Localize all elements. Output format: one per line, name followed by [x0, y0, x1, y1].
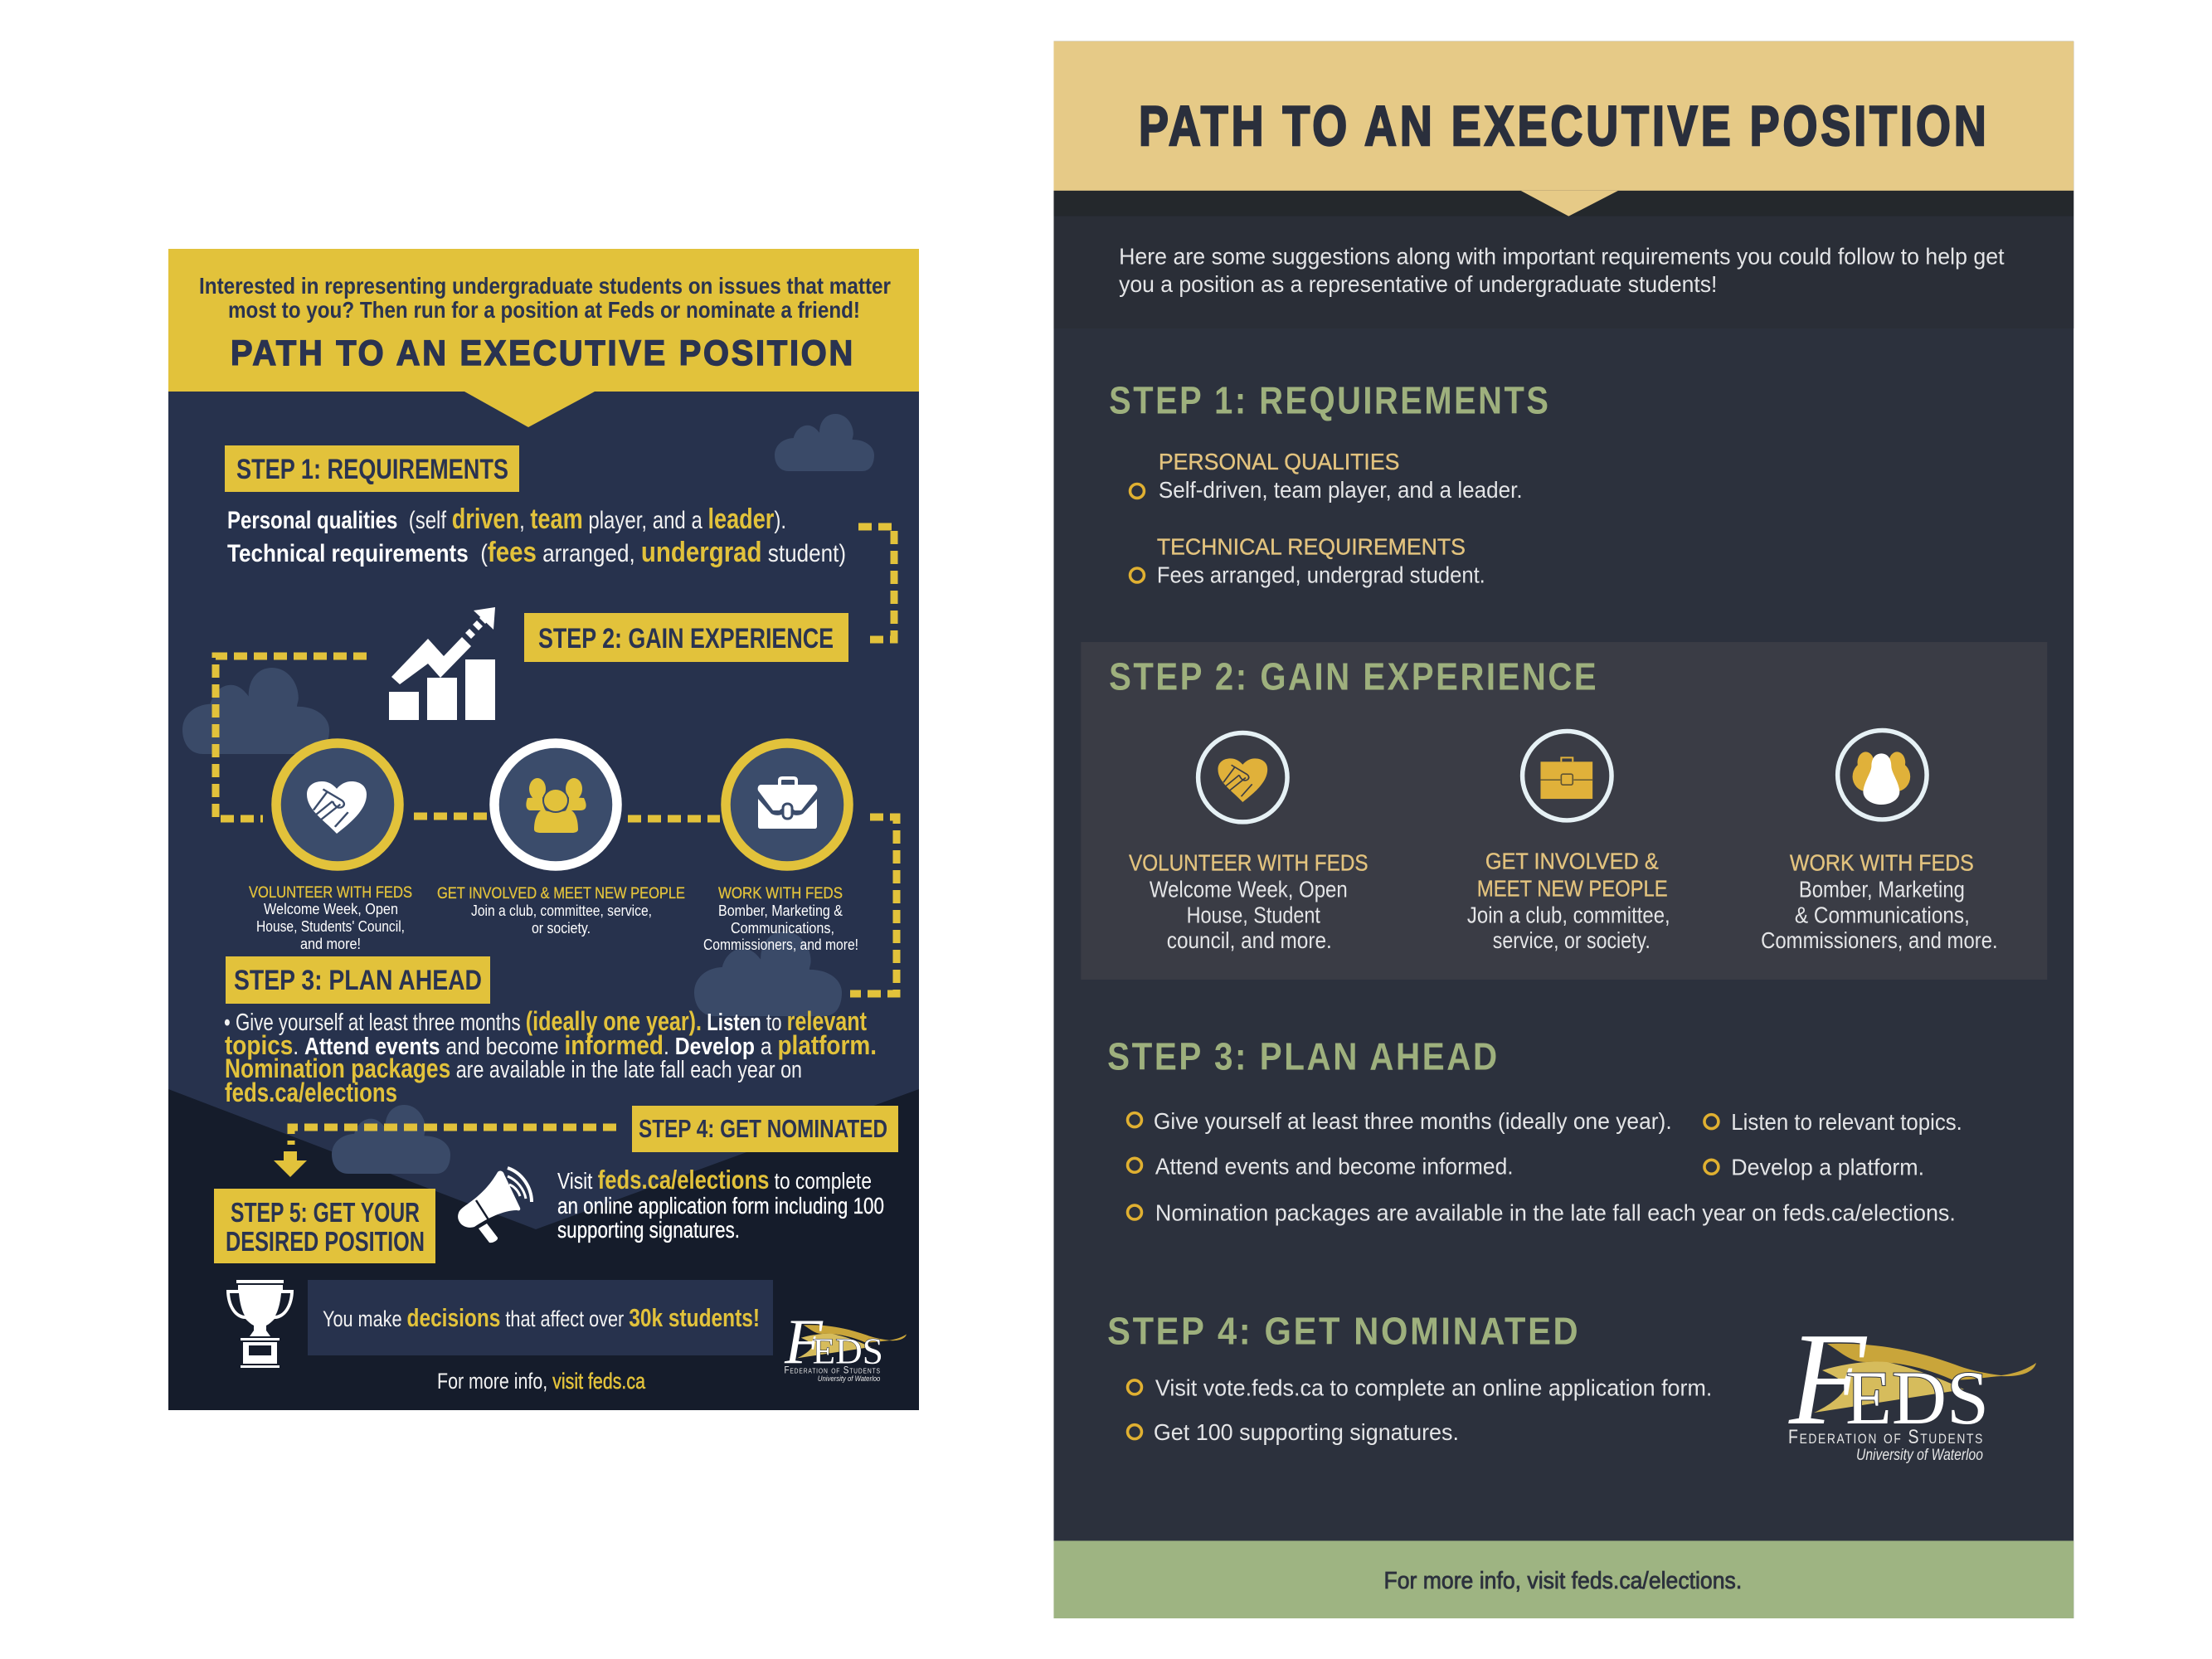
icon: people	[1838, 730, 1927, 820]
logo: feds large: EDS	[1845, 1355, 1989, 1440]
step 3 text: topics. Attend events and become informed. Develop a platform.	[225, 1029, 877, 1060]
intro text: Here are some suggestions along with important requirements you could follow to help get	[1119, 243, 2005, 269]
title: PATH TO AN EXECUTIVE POSITION	[231, 333, 855, 373]
text: volunteer with feds: House, Students' Council,	[256, 918, 405, 935]
arrow: circle 3 to step 3	[850, 817, 897, 994]
header band	[168, 249, 919, 427]
text: work with feds	[703, 885, 858, 953]
step 2 label: STEP 2: GAIN EXPERIENCE	[538, 623, 834, 654]
text: work with feds: Bomber, Marketing &	[718, 902, 843, 919]
text: get involved: service, or society.	[1493, 927, 1650, 953]
step 5 label: DESIRED POSITION	[226, 1226, 425, 1257]
step 3 list: Listen to relevant topics.	[1731, 1109, 1962, 1135]
step 1 label: STEP 1: REQUIREMENTS	[236, 454, 508, 485]
cloud: left	[182, 668, 329, 754]
cloud: lower right	[694, 932, 842, 1016]
text: work with feds: Communications,	[731, 920, 834, 937]
text: get involved: GET INVOLVED &	[1485, 849, 1659, 874]
step 4 text: an online application form including 100	[557, 1193, 884, 1219]
step 5 label: STEP 5: GET YOUR	[231, 1197, 420, 1228]
step 2 heading: STEP 2: GAIN EXPERIENCE	[1109, 655, 1598, 698]
step 1 heading: STEP 1: REQUIREMENTS	[1109, 378, 1550, 421]
icon: trophy	[226, 1280, 294, 1368]
step 3 list: Give yourself at least three months (ideally one year).	[1154, 1108, 1672, 1134]
title: PATH TO AN EXECUTIVE POSITION	[1139, 95, 1990, 158]
logo: feds large: University of Waterloo	[1856, 1447, 1983, 1464]
step 1 technical requirements: Fees arranged, undergrad student.	[1157, 562, 1485, 587]
intro background	[1053, 216, 2073, 328]
arrow: step 4 to step 5	[274, 1127, 616, 1177]
text: get involved: GET INVOLVED & MEET NEW PEOPLE	[437, 885, 685, 902]
text: volunteer with feds: council, and more.	[1167, 927, 1332, 953]
dark lower background	[168, 1089, 919, 1410]
logo: feds small	[784, 1306, 907, 1383]
step 3 label	[226, 956, 490, 1004]
footer band	[1053, 1540, 2073, 1618]
text: get involved: Join a club, committee,	[1467, 902, 1670, 927]
intro text	[1119, 243, 2005, 297]
icon: growth chart	[389, 607, 495, 720]
step 4 label	[632, 1106, 898, 1152]
icon: briefcase	[758, 778, 817, 829]
icon: handshake heart	[307, 781, 367, 834]
text: work with feds: WORK WITH FEDS	[1790, 850, 1974, 876]
intro text: you a position as a representative of undergraduate students!	[1119, 271, 1717, 297]
panel: left poster	[168, 249, 919, 1410]
step 1 technical requirements	[1130, 534, 1485, 587]
icon: megaphone	[458, 1168, 532, 1243]
callout: decisions banner	[308, 1280, 773, 1355]
step 3 list	[1128, 1108, 1962, 1225]
step 3 heading: STEP 3: PLAN AHEAD	[1107, 1034, 1500, 1078]
panel background	[1053, 41, 2073, 1618]
header intro text: most to you? Then run for a position at Feds or nominate a friend!	[228, 297, 860, 323]
step 1 text	[227, 504, 846, 568]
step 4 label: STEP 4: GET NOMINATED	[639, 1114, 887, 1143]
circle: get involved	[494, 743, 617, 866]
logo: feds large: Federation of Students	[1788, 1426, 1984, 1448]
arrow: step 1 to step 2	[858, 527, 894, 640]
step 3 text	[224, 1005, 877, 1107]
text: get involved: MEET NEW PEOPLE	[1477, 875, 1668, 901]
step 5 label	[214, 1189, 435, 1263]
arrow: step 2 to circles	[216, 656, 367, 819]
icon: people	[526, 778, 586, 833]
logo: feds small: Federation of Students	[785, 1365, 881, 1375]
circle: work with feds	[726, 743, 848, 866]
arrow: circle 2 to circle 3	[628, 815, 720, 823]
step 1 technical requirements: TECHNICAL REQUIREMENTS	[1157, 534, 1466, 560]
footer band: For more info, visit feds.ca/elections.	[1383, 1568, 1742, 1594]
logo: feds large: F	[1788, 1305, 1868, 1452]
panel: step 2	[1081, 642, 2047, 980]
callout: decisions banner: You make decisions that affect over 30k students!	[323, 1304, 760, 1332]
step 4 text: supporting signatures.	[557, 1217, 740, 1243]
step 3 text: Nomination packages are available in the late fall each year on	[225, 1053, 802, 1083]
step 4 text: Visit feds.ca/elections to complete	[557, 1165, 872, 1194]
step 3 list: Attend events and become informed.	[1155, 1154, 1514, 1180]
logo: feds large	[1788, 1305, 2036, 1464]
circle: volunteer	[276, 743, 399, 866]
step 4 text	[557, 1165, 884, 1243]
icon: heart handshake	[1198, 732, 1287, 822]
step 4 list	[1128, 1374, 1712, 1445]
step 4 list: Get 100 supporting signatures.	[1154, 1419, 1459, 1445]
dark band	[1053, 191, 2073, 216]
text: work with feds: Commissioners, and more.	[1761, 927, 1998, 953]
header band	[1053, 41, 2073, 216]
logo: feds small: EDS	[813, 1331, 883, 1372]
text: get involved: or society.	[532, 920, 591, 937]
step 2 label	[524, 613, 848, 662]
text: volunteer with feds	[1129, 850, 1369, 953]
text: work with feds: & Communications,	[1795, 902, 1970, 927]
header intro text	[199, 273, 891, 323]
text: get involved	[437, 885, 685, 937]
text: volunteer with feds: Welcome Week, Open	[264, 901, 398, 917]
cloud: bottom	[332, 1105, 450, 1174]
step 1 personal qualities	[1130, 449, 1523, 503]
step 1 text: Personal qualities (self driven, team player, and a leader).	[227, 504, 786, 535]
step 4 heading: STEP 4: GET NOMINATED	[1107, 1310, 1580, 1353]
step 4 list: Visit vote.feds.ca to complete an online application form.	[1155, 1374, 1712, 1400]
text: work with feds: Commissioners, and more!	[703, 937, 858, 953]
step 1 text: Technical requirements (fees arranged, undergrad student)	[227, 537, 846, 568]
text: volunteer with feds: VOLUNTEER WITH FEDS	[249, 884, 412, 902]
text: volunteer with feds: and more!	[300, 936, 361, 952]
step 3 text: feds.ca/elections	[225, 1078, 397, 1107]
text: volunteer with feds	[249, 884, 412, 952]
logo: feds small: F	[784, 1306, 824, 1378]
cloud: top right	[775, 414, 874, 471]
header intro text: Interested in representing undergraduate students on issues that matter	[199, 273, 891, 299]
text: get involved	[1467, 849, 1670, 953]
icon: briefcase	[1523, 731, 1612, 820]
poster background	[168, 249, 919, 1410]
text: get involved: Join a club, committee, service,	[471, 902, 652, 919]
text: volunteer with feds: VOLUNTEER WITH FEDS	[1129, 850, 1369, 876]
step 1 personal qualities: PERSONAL QUALITIES	[1159, 449, 1399, 474]
step 1 label	[225, 445, 519, 492]
text: work with feds	[1761, 850, 1998, 953]
text: volunteer with feds: House, Student	[1187, 902, 1320, 927]
footer text: For more info, visit feds.ca	[437, 1369, 646, 1394]
arrow: circle 1 to circle 2	[414, 813, 489, 820]
panel: right poster	[1053, 41, 2073, 1618]
step 3 label: STEP 3: PLAN AHEAD	[234, 965, 482, 996]
step 3 list: Develop a platform.	[1731, 1155, 1924, 1180]
text: work with feds: Bomber, Marketing	[1799, 876, 1965, 902]
logo: feds small: University of Waterloo	[818, 1374, 880, 1383]
text: volunteer with feds: Welcome Week, Open	[1150, 876, 1348, 902]
text: work with feds: WORK WITH FEDS	[718, 885, 843, 902]
step 3 list: Nomination packages are available in the late fall each year on feds.ca/elections.	[1155, 1199, 1956, 1225]
step 3 text: • Give yourself at least three months (ideally one year). Listen to relevant	[224, 1005, 867, 1036]
step 1 personal qualities: Self-driven, team player, and a leader.	[1159, 477, 1523, 503]
